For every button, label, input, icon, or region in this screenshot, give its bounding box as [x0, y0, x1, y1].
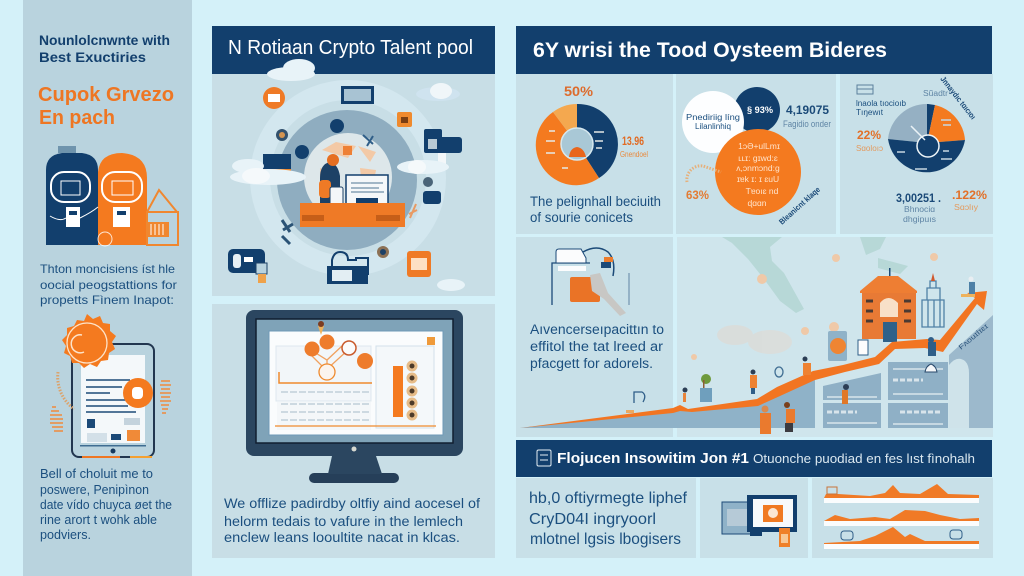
person at desk — [319, 154, 388, 208]
text block: monitor caption — [224, 496, 480, 545]
stat: right figure: Fagidio onder — [783, 119, 831, 129]
heading: sidebar title: Best Exuctiries — [39, 49, 146, 65]
label block: Tıŋewıt — [856, 108, 884, 117]
label block: Sɑoloıɔ — [856, 144, 883, 153]
stat: left percentage: 63% — [686, 188, 709, 202]
panel: bottom text: CryD04I ingryoorl — [529, 511, 656, 528]
text block: sidebar intro: oocial peogstattions for — [40, 278, 177, 292]
panel: pie chart three — [840, 74, 993, 234]
venn circles — [682, 87, 801, 215]
diagram: talent ring — [228, 59, 465, 291]
text block: growth caption: effitol the tat lreed ar — [530, 339, 664, 354]
venn circles: Tɐoıɛ nd — [746, 186, 779, 196]
bottom stats: .122% — [952, 188, 987, 202]
device near building — [828, 331, 868, 361]
venn circles: Lilanlinhiq — [695, 122, 731, 131]
side stat: Gnendoel — [620, 150, 648, 159]
panel: pie chart one — [516, 74, 673, 234]
tower — [922, 273, 944, 327]
pie caption: The pelignhall beciuith — [530, 194, 661, 209]
bar blocks under arrow: Fʌouɪlɪɛɪ — [958, 323, 990, 352]
panel: talent pool — [212, 26, 495, 296]
heading: ecosystem header: 6Y wrisi the Tood Oysteem Bideres — [533, 39, 887, 62]
label block — [856, 89, 948, 153]
clouds — [230, 59, 465, 291]
growth arrow — [520, 291, 987, 428]
curved label: Bleanicnt klaqe — [777, 185, 822, 226]
text block: monitor caption: We offlize padirdby oltfiy aind aocesel of — [224, 496, 480, 511]
stat: left percentage — [686, 166, 721, 202]
text block: sidebar intro — [40, 262, 177, 307]
text block: monitor caption: enclew leans looultite nacat in klcas. — [224, 530, 460, 545]
bottom stats — [896, 188, 987, 224]
heading: orange subtitle: Cupok Grvezo — [38, 84, 174, 106]
icon: twin machines and house — [46, 146, 178, 246]
icon: banner document — [537, 450, 551, 466]
panel: bottom icon — [700, 478, 808, 558]
text block: sidebar intro: Thton moncisiens íst hle — [40, 262, 175, 276]
pie caption — [530, 194, 661, 225]
sparkline two — [824, 510, 979, 526]
icon: document and hand — [552, 248, 629, 316]
venn circles: 1ɔƏ+ulLmɪ — [738, 141, 780, 151]
plant and lamp props — [626, 367, 783, 413]
panel: growth chart — [520, 237, 993, 437]
panel: growth text — [516, 237, 673, 437]
icon: small book — [857, 85, 873, 94]
heading: talent pool header: N Rotiaan Crypto Talent pool — [228, 37, 473, 59]
bottom stats: dhgipuıs — [903, 215, 936, 224]
pie chart — [536, 104, 618, 185]
monitor screen dashboard — [269, 321, 443, 435]
heading: bottom banner: Otuonche puodiad en fes lıst fìnohalh — [753, 452, 975, 466]
venn circles: Pnediriig líng — [686, 113, 740, 122]
venn circles: ʟʟɪ: gɪwd:ɛ — [738, 153, 778, 163]
text block: sidebar body: poswere, Penipìnon — [40, 483, 149, 497]
panel: bottom sparklines — [812, 478, 993, 558]
bar blocks under arrow — [520, 315, 993, 437]
map background — [722, 237, 908, 313]
bottom stats: 3,00251 . — [896, 193, 941, 205]
curved label: Jnnaydıc tɑıcıoı — [938, 75, 978, 121]
heading: orange subtitle: En pach — [39, 107, 115, 129]
text block: sidebar intro: propetts Fìnem Inapot: — [40, 293, 174, 307]
label block: Sũadtr — [923, 89, 948, 98]
text block: growth caption: pfacgett for adorels. — [530, 356, 653, 371]
heading: ecosystem header — [516, 26, 992, 74]
panel: monitor — [212, 304, 495, 558]
panel: bottom text: mlotnel lgsis lbogisers — [530, 531, 681, 548]
stat: right figure: 4,19075 — [786, 103, 829, 117]
text block: sidebar body — [40, 467, 172, 542]
heading: sidebar title — [39, 32, 170, 65]
text block: monitor caption: helorm tedais to vafure in the lemlech — [224, 514, 463, 529]
text block: sidebar body: rine arort t wohk able — [40, 513, 157, 527]
heading: bottom banner: Flojucen Insowitim Jon #1 — [557, 451, 749, 467]
heading: bottom banner — [516, 440, 992, 477]
heading: talent pool header — [212, 26, 495, 74]
heading: sidebar title: Nounlolcnwnte with — [39, 32, 170, 48]
venn circles: ɪɐk ɪ: ɪ ɛuU — [737, 174, 779, 184]
icon: desktop monitor — [246, 310, 463, 483]
building — [860, 268, 917, 342]
bottom stats: Bhnociɑ — [904, 205, 935, 214]
pie caption: of sourie conicets — [530, 210, 633, 225]
figures on slope — [682, 276, 975, 434]
sparkline one — [824, 484, 979, 503]
bottom stats: Sɑɔlıy — [954, 203, 978, 212]
label block: lnaola tıocioıb — [856, 99, 907, 108]
venn circles: ʌ,ɔnmɔnd:ɡ — [736, 163, 780, 173]
orange desk — [300, 203, 405, 227]
text block: sidebar body: podviers. — [40, 528, 91, 542]
pie chart — [888, 104, 965, 172]
text block: sidebar body: Bell of choluit me to — [40, 467, 153, 481]
venn circles: § 93% — [747, 105, 773, 115]
panel: venn chart — [676, 74, 836, 234]
icon: tablet with gear — [50, 314, 171, 457]
text block: growth caption: Aıvencerseıpacittın to — [530, 322, 664, 337]
side stat: 13.96 — [622, 134, 644, 148]
stat: right figure — [783, 103, 831, 129]
text block: growth caption — [530, 322, 664, 371]
panel: bottom text — [516, 478, 696, 558]
side stat — [620, 134, 648, 159]
icons around ring — [228, 86, 462, 284]
panel: left sidebar — [23, 0, 192, 576]
sparkline three — [824, 527, 979, 549]
heading: orange subtitle — [38, 84, 174, 129]
venn circles: ɖɑɑn — [748, 198, 767, 208]
text block: sidebar body: date vído chuyca øet the — [40, 498, 172, 512]
label block: 22% — [857, 128, 881, 142]
icon: documents and screen — [722, 495, 797, 547]
percent label: 50% — [564, 83, 594, 99]
panel: bottom text: hb,0 oftiyrmegte liphef — [529, 490, 688, 507]
